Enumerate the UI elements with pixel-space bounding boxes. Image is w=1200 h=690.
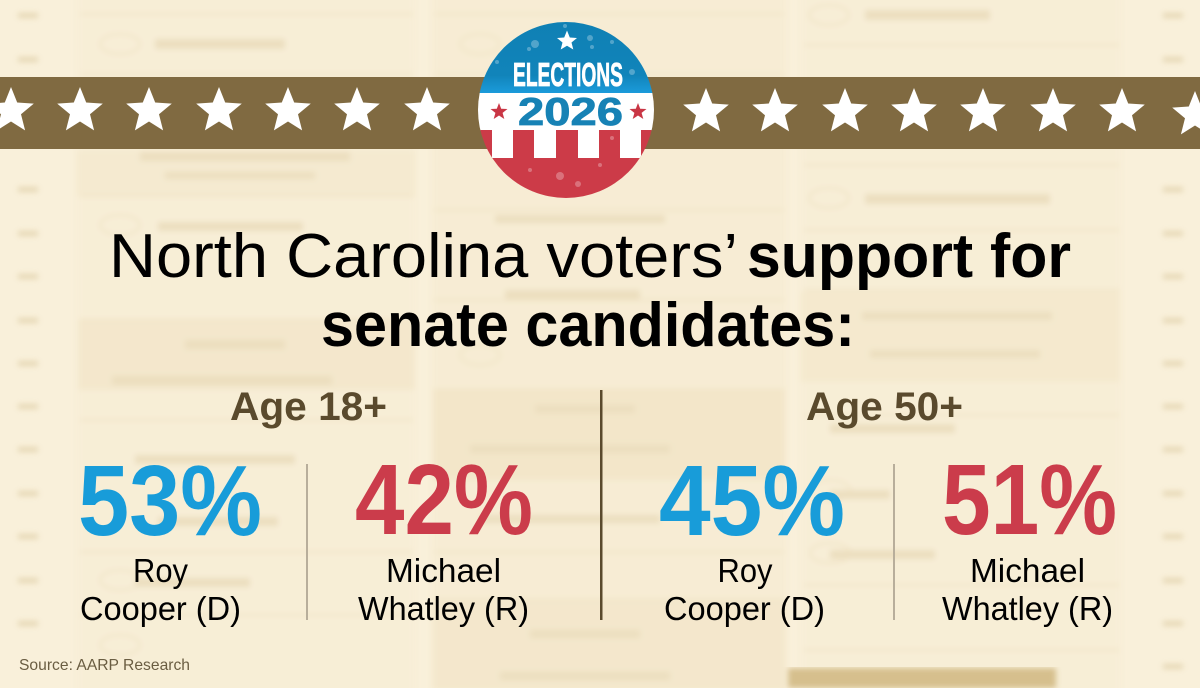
stat: Whatley 51%	[942, 444, 1117, 627]
stat: Whatley 51%: Whatley (R)	[942, 590, 1113, 627]
icon: white star on badge	[557, 30, 577, 50]
source note: Source: AARP Research	[19, 657, 190, 674]
stat: Cooper 45%: Cooper (D)	[664, 590, 825, 627]
badge year: 2026: 2026	[518, 91, 623, 134]
stat: Cooper 53%: Roy	[133, 552, 188, 589]
stat: Whatley 42%: 42%	[355, 444, 533, 556]
stat: Cooper 53%	[78, 445, 262, 627]
stat: Whatley 51%: Michael	[970, 552, 1085, 589]
icon: red star right	[630, 103, 646, 119]
badge word: Elections: ELECTIONS	[513, 56, 623, 93]
stat: Cooper 53%: Cooper (D)	[80, 590, 241, 627]
stat: Cooper 45%: 45%	[659, 445, 845, 557]
heading: age 18+: Age 18+	[230, 385, 387, 429]
panel: age 50+	[659, 385, 1117, 627]
star banner	[0, 77, 1200, 149]
icon: red star left	[490, 103, 508, 119]
stat: Whatley 42%: Michael	[386, 552, 501, 589]
title: North Carolina voters’	[109, 222, 738, 291]
icon: Elections 2026 badge	[478, 22, 654, 198]
heading: age 50+: Age 50+	[806, 385, 963, 429]
stat: Cooper 53%: 53%	[78, 445, 262, 557]
title: senate candidates:	[321, 291, 855, 360]
stat: Cooper 45%: Roy	[718, 552, 773, 589]
panel: age 18+	[78, 385, 533, 627]
stat: Whatley 42%: Whatley (R)	[358, 590, 529, 627]
stat: Cooper 45%	[659, 445, 845, 627]
title	[109, 222, 1071, 360]
title: support for	[747, 222, 1071, 291]
stat: Whatley 51%: 51%	[942, 444, 1117, 556]
stat: Whatley 42%	[355, 444, 533, 627]
